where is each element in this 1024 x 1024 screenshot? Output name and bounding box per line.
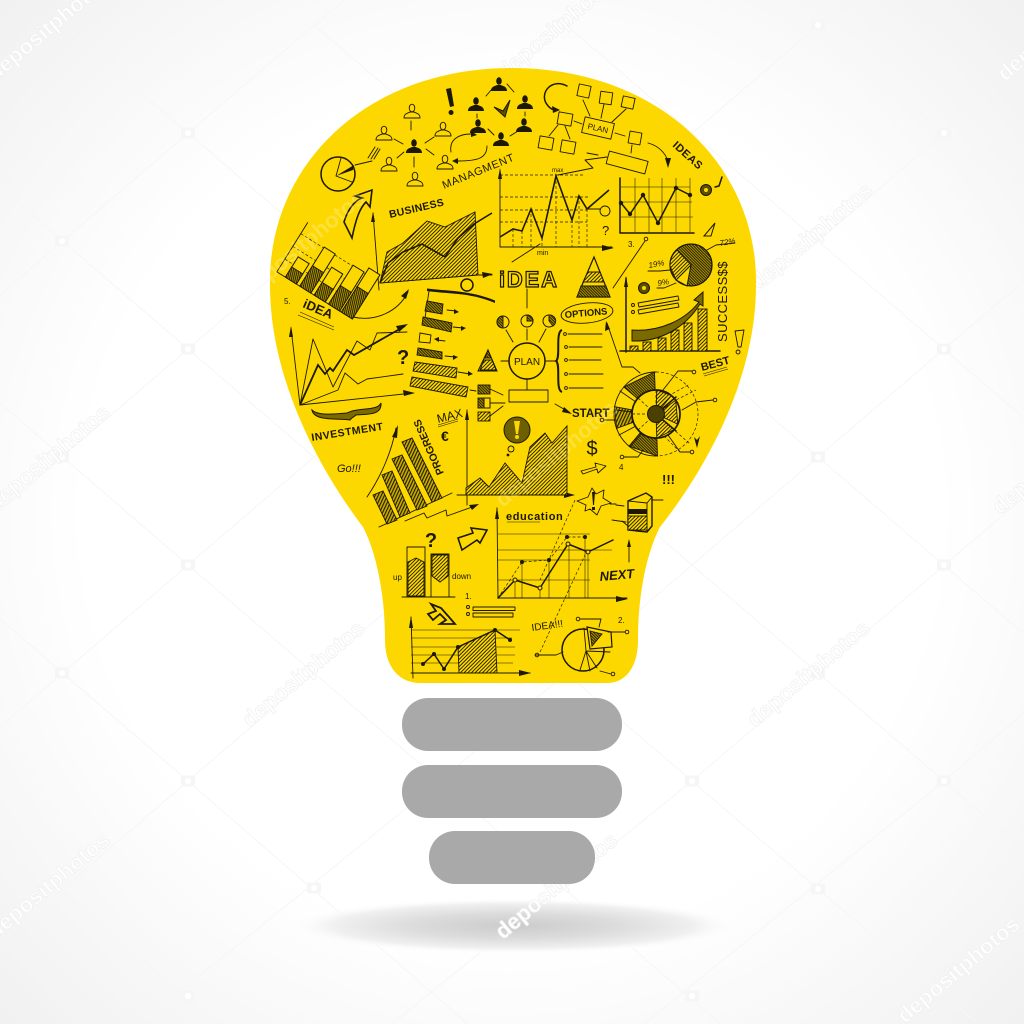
label: business: BUSINESS bbox=[388, 197, 445, 221]
plan flow diagram: PLAN bbox=[587, 122, 609, 135]
label: investment: INVESTMENT bbox=[311, 421, 384, 444]
peak line chart: min bbox=[537, 250, 548, 257]
brace bbox=[312, 403, 381, 420]
exclamation bubble bbox=[504, 417, 530, 456]
plan flow diagram bbox=[538, 84, 671, 175]
bulb base bars bbox=[402, 698, 622, 884]
label: question mark: ? bbox=[397, 347, 409, 369]
label: idea tilted: iDEA bbox=[301, 296, 336, 322]
watermark text: depositphotos bbox=[742, 615, 874, 732]
tilted bar chart bbox=[277, 223, 383, 319]
label: next with arrow bbox=[599, 539, 636, 584]
small triangle bbox=[478, 350, 497, 371]
watermark over bulb bbox=[237, 185, 622, 512]
mountain area chart bbox=[457, 409, 575, 505]
bulb glass bbox=[270, 68, 756, 683]
large pie chart: 9% bbox=[657, 277, 670, 288]
lower pie chart bbox=[535, 617, 629, 676]
icon: exclamation bbox=[446, 88, 454, 115]
label: idea tilted bbox=[298, 296, 336, 330]
large pie chart bbox=[648, 236, 736, 288]
education line chart bbox=[495, 500, 628, 652]
large pie chart: 72% bbox=[719, 236, 736, 248]
icon: 3D arrow right bbox=[458, 528, 487, 550]
label: education: education bbox=[506, 511, 563, 523]
label: 5.: 5. bbox=[284, 297, 291, 306]
ground shadow bbox=[288, 898, 740, 954]
plan mind map bbox=[497, 289, 603, 402]
donut wheel chart bbox=[600, 370, 717, 459]
up down bar chart bbox=[393, 530, 471, 597]
label: 4: 4 bbox=[619, 463, 624, 472]
curved arrow bbox=[353, 289, 409, 318]
people network bbox=[376, 77, 533, 186]
label: 3. with leader: 3. bbox=[628, 240, 635, 249]
up down bar chart: ? bbox=[425, 530, 437, 552]
label: 2.: 2. bbox=[618, 616, 625, 625]
grid line chart bbox=[619, 178, 694, 233]
investment line chart bbox=[289, 324, 415, 405]
label: success: SUCCESS$$ bbox=[715, 261, 730, 342]
start label with arrow bbox=[555, 404, 609, 420]
pyramid bbox=[577, 257, 610, 297]
burst with exclamation bbox=[577, 488, 626, 522]
options bubble bbox=[560, 300, 640, 373]
business area chart bbox=[371, 212, 493, 290]
watermark over bulb: depositphotos bbox=[490, 395, 622, 512]
lower line chart bbox=[409, 616, 531, 678]
target icon and check bbox=[700, 177, 722, 236]
label: max with euro bbox=[435, 406, 464, 444]
watermark text: depositphotos bbox=[237, 615, 369, 732]
success bar chart bbox=[620, 276, 720, 352]
up down bar chart: up bbox=[393, 573, 402, 582]
large pie chart: 19% bbox=[648, 258, 665, 270]
label: idea exclaim: IDEA!!! bbox=[531, 619, 564, 634]
icon: outlined exclamation bbox=[735, 330, 744, 354]
icon: outline arrow bbox=[581, 463, 606, 474]
small pie chart bbox=[321, 147, 380, 191]
zigzag arrow bbox=[405, 504, 479, 521]
label: next with arrow: NEXT bbox=[599, 566, 636, 584]
watermark over shadow: depositphotos bbox=[490, 827, 622, 944]
progress bar chart bbox=[367, 425, 452, 527]
start label with arrow: START bbox=[572, 408, 609, 420]
label: ideas tilted: IDEAS bbox=[670, 139, 705, 172]
label: max with euro: MAX bbox=[435, 406, 464, 426]
big idea heading: iDEA bbox=[499, 267, 559, 292]
peak line chart bbox=[498, 168, 614, 262]
label: dollar: $ bbox=[586, 438, 598, 460]
peak line chart: ? bbox=[602, 223, 609, 238]
watermark over bulb: depositphotos bbox=[237, 185, 369, 302]
label: managment: MANAGMENT bbox=[441, 152, 516, 192]
target icon small bbox=[638, 282, 650, 294]
up down bar chart: down bbox=[452, 572, 471, 581]
label: max with euro: € bbox=[441, 428, 449, 444]
options bubble: OPTIONS bbox=[564, 306, 608, 321]
icon: check mark bbox=[494, 100, 510, 117]
label: progress: PROGRESS bbox=[412, 417, 447, 477]
plan mind map: PLAN bbox=[514, 357, 540, 368]
label: triple exclamation: !!! bbox=[662, 472, 675, 487]
peak line chart: max bbox=[552, 168, 563, 174]
label: 1. with bars bbox=[465, 592, 515, 617]
stepped bar list with clip bbox=[410, 279, 495, 397]
3D box bbox=[616, 493, 663, 532]
stacked small boxes bbox=[478, 385, 505, 421]
icon: curved 3D arrow bbox=[344, 190, 372, 238]
label: best: BEST bbox=[700, 355, 731, 374]
watermark text: depositphotos bbox=[745, 177, 877, 294]
label: 1. with bars: 1. bbox=[465, 592, 472, 601]
label: go: Go!!! bbox=[337, 463, 361, 475]
icon: bold arrow down bbox=[428, 604, 455, 624]
label: 3. with leader bbox=[613, 237, 648, 288]
